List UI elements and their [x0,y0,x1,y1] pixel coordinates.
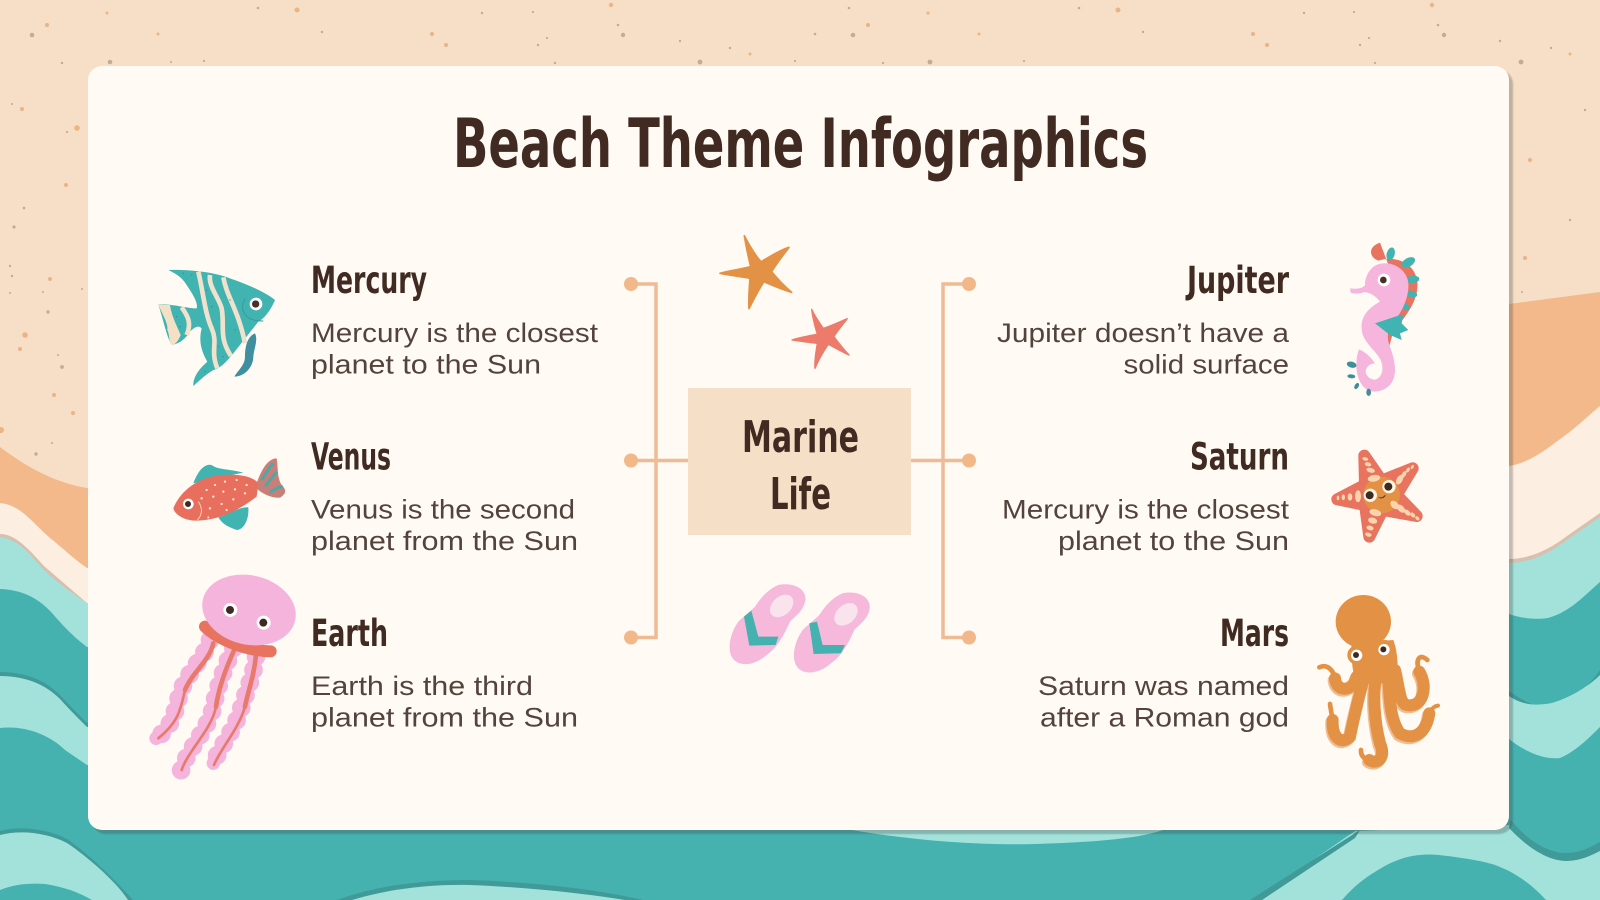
item: Venus [173,436,578,556]
icon: angelfish [158,270,275,386]
item: Venus: planet from the Sun [311,526,578,556]
item: Earth: Earth [311,612,388,655]
connector: left bracket [624,277,688,644]
item: Saturn [1002,436,1420,556]
item: Mercury [158,259,599,386]
right flip flop [794,593,870,673]
item: Venus: Venus is the second [311,494,575,524]
icon: flip flops [730,584,870,673]
icon: coral starfish [792,309,849,368]
icon: seahorse [1346,243,1420,396]
icon: octopus [1319,595,1438,764]
sand speckles [0,3,1586,456]
central box: Marine Life: Marine [742,412,859,463]
item: Earth [156,566,578,772]
light wave one [0,517,1600,900]
item: Mercury: Mercury is the closest [311,318,599,348]
wave shadow two [0,670,1600,900]
pale foam band [0,406,1600,900]
connector: right bracket [911,277,976,644]
item: Jupiter: solid surface [1124,350,1289,380]
item: Saturn: Mercury is the closest [1002,494,1290,524]
item: Mars: Mars [1220,612,1289,655]
item: Mars: Saturn was named [1038,671,1289,701]
item: Jupiter [997,243,1420,396]
central box: Marine Life [688,388,911,535]
item: Earth: Earth is the third [311,671,533,701]
icon: red fish [173,458,285,530]
item: Saturn: Saturn [1190,436,1289,478]
aqua patch under card [830,826,1172,844]
bottom centre crest [337,880,643,900]
item: Saturn: planet to the Sun [1058,526,1289,556]
item: Mars [1038,595,1438,764]
lower right wave [1255,825,1600,900]
lower left wave [0,828,133,900]
item: Mercury: planet to the Sun [311,350,541,380]
central box: Marine Life: Life [770,469,831,520]
icon: orange starfish [720,236,792,309]
item: Mercury: Mercury [311,259,427,302]
teal wave two [0,727,1600,900]
peach wet sand band [0,292,1600,900]
main card [88,66,1513,834]
teal wave one [0,582,1600,900]
icon: smiling starfish [1337,456,1420,537]
left flip flop [730,584,805,664]
item: Jupiter: Jupiter doesn’t have a [997,318,1290,348]
item: Mars: after a Roman god [1040,702,1289,732]
item: Jupiter: Jupiter [1185,259,1289,302]
item: Venus: Venus [311,436,391,478]
title: Beach Theme Infographics [453,105,1148,184]
light wave two [0,675,1600,900]
wave shadow [0,513,1600,900]
icon: jellyfish [156,566,303,772]
item: Earth: planet from the Sun [311,702,578,732]
